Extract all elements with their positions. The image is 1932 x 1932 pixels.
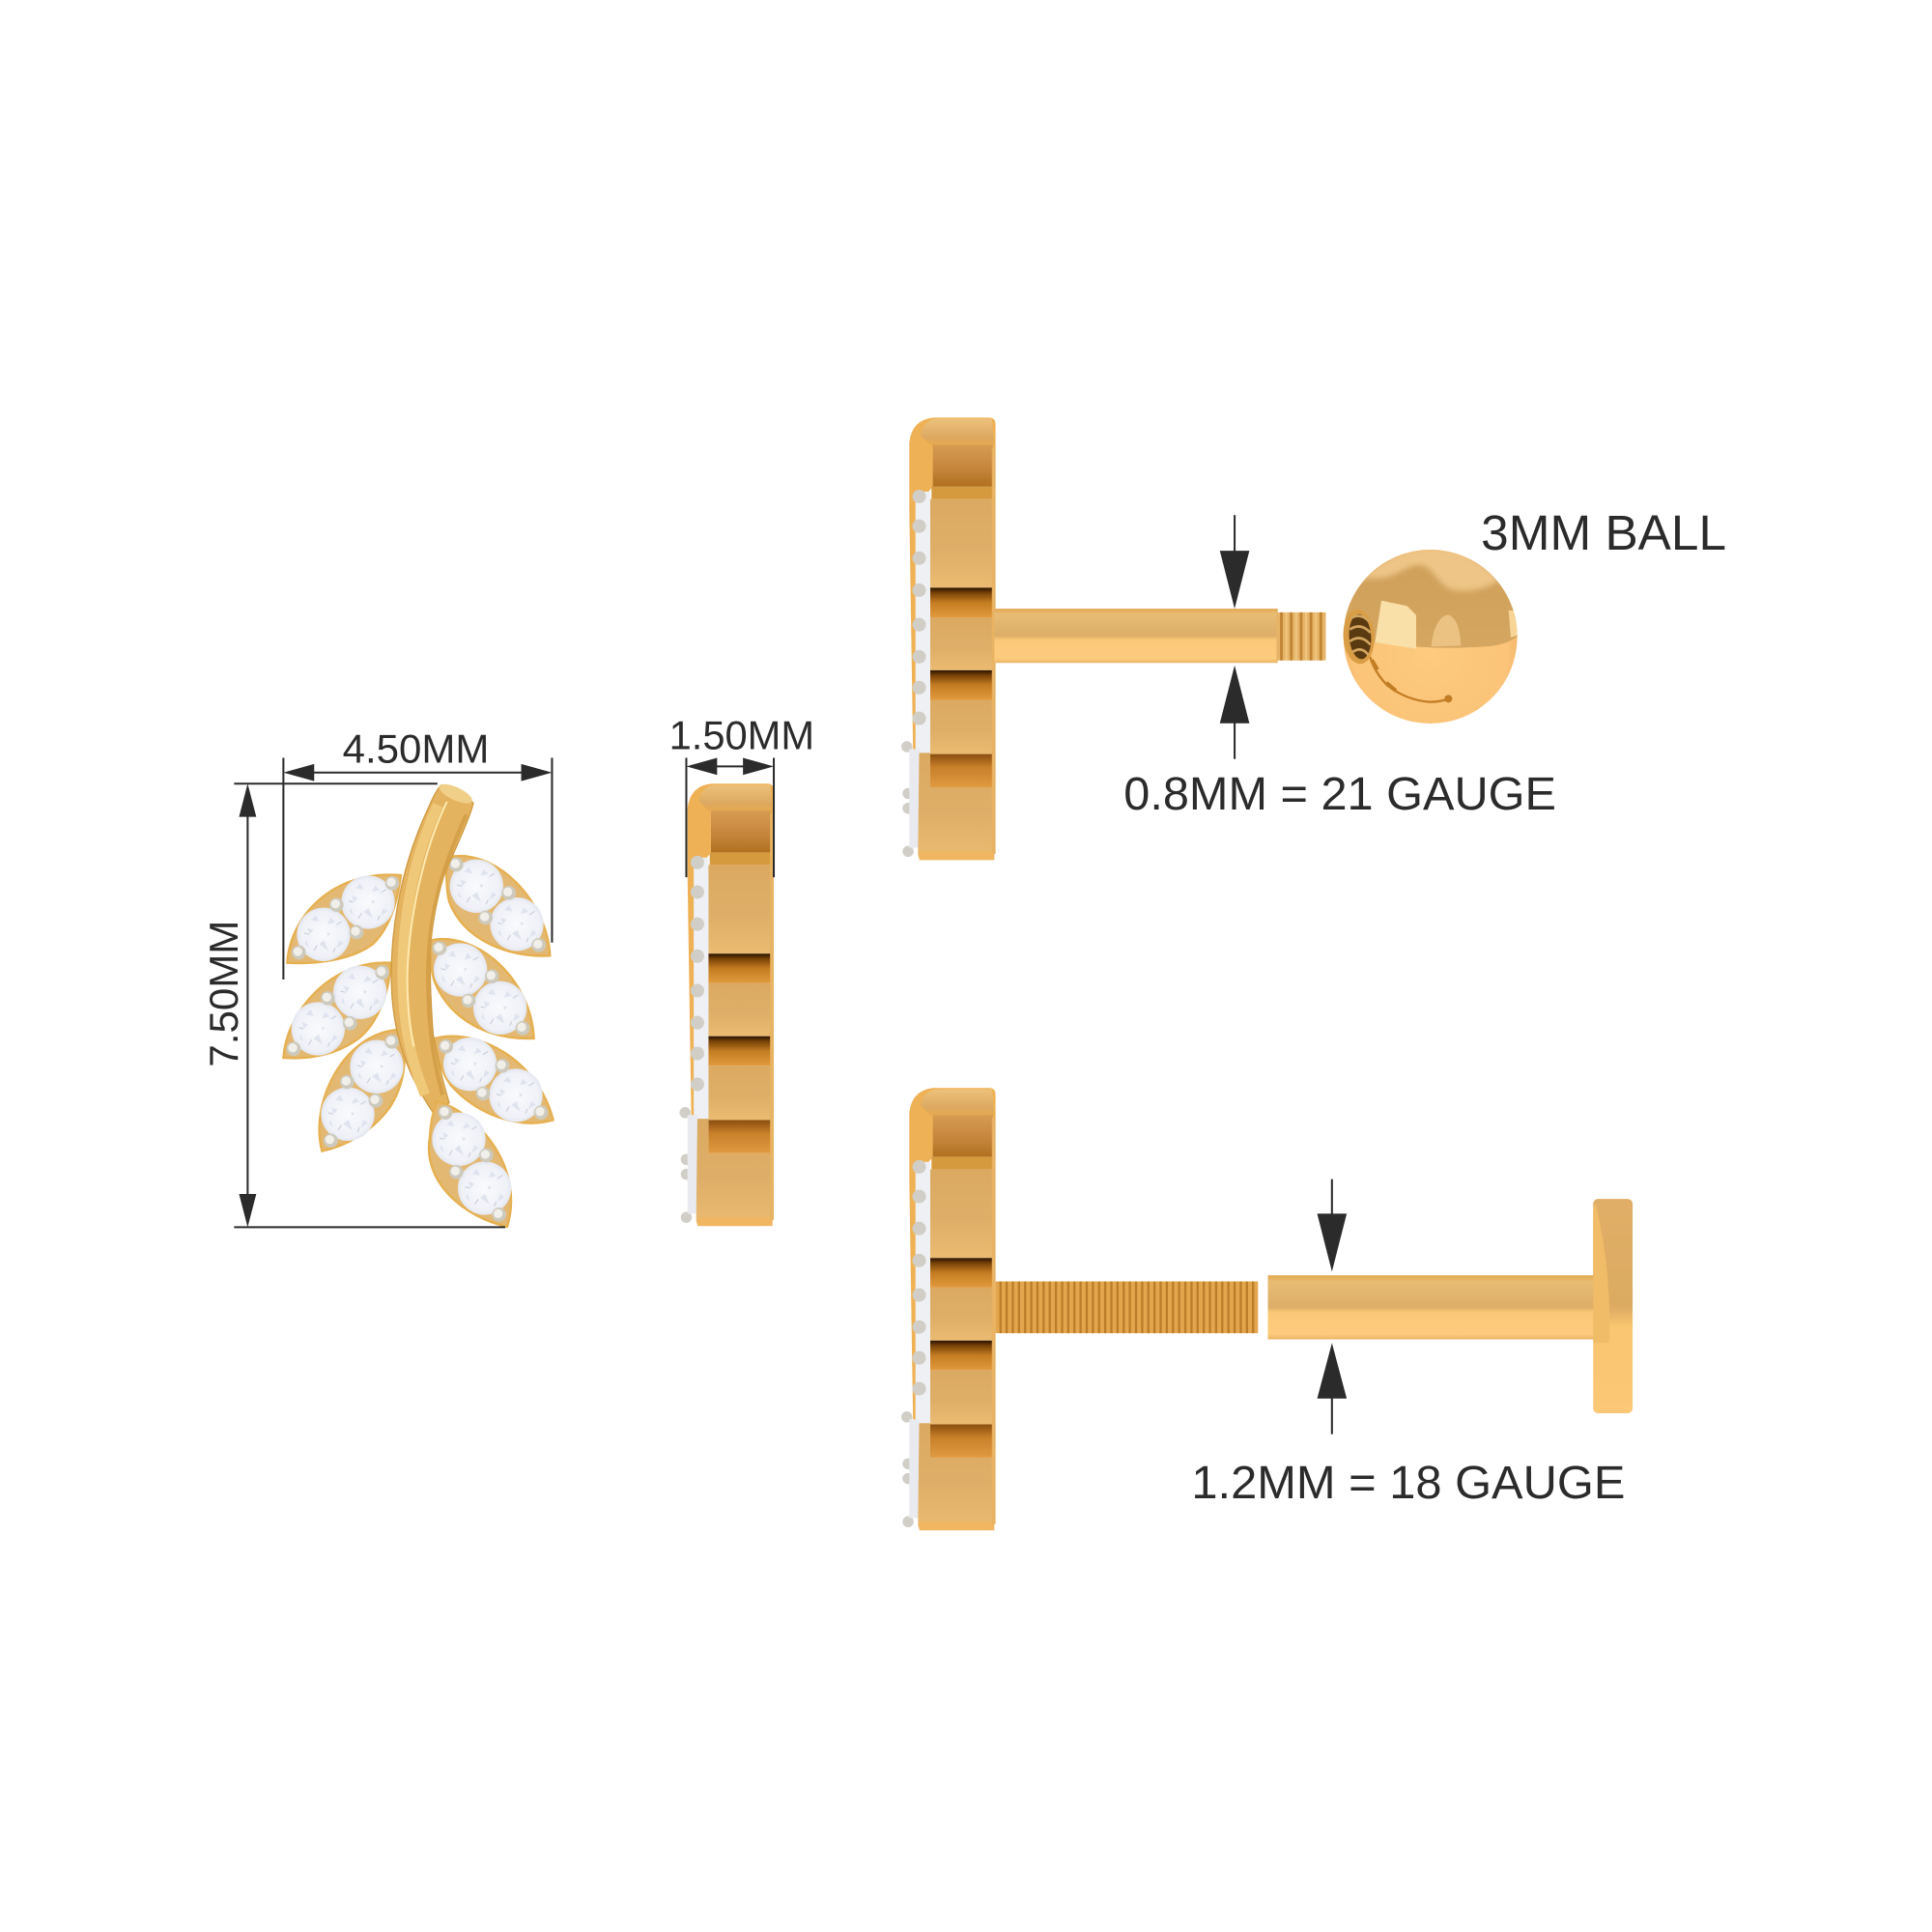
- leaf: top left: [287, 875, 401, 963]
- leaf: middle right: [430, 939, 534, 1038]
- dimension: width 4.50MM: 4.50MM: [343, 726, 489, 772]
- arrow: bottom: [1220, 666, 1249, 759]
- back rod: [1267, 1275, 1595, 1339]
- arrow: top: [1220, 515, 1249, 609]
- side view of leaf: [679, 783, 774, 1226]
- side view: lower: [901, 1088, 996, 1530]
- arrow: top: [1318, 1179, 1347, 1271]
- dimension: thickness 1.50MM: 1.50MM: [669, 713, 814, 758]
- dimension: height 7.50MM: 7.50MM: [201, 921, 246, 1067]
- label: gauge 18: 1.2MM = 18 GAUGE: [1191, 1457, 1625, 1509]
- threaded post: [996, 1282, 1258, 1333]
- stud with ball back: [901, 417, 1726, 860]
- leaf: bottom: [429, 1101, 511, 1227]
- stem: [391, 781, 474, 1113]
- dimension: height 7.50MM: [201, 783, 505, 1227]
- stud with flat back: [901, 1088, 1633, 1530]
- post threads: [1276, 612, 1325, 661]
- leaf: lower right: [435, 1037, 554, 1123]
- label: gauge 21: 0.8MM = 21 GAUGE: [1123, 768, 1556, 820]
- leaf: top right: [446, 856, 550, 956]
- dimension: width 4.50MM: [283, 726, 552, 980]
- dimension: thickness 1.50MM: [669, 713, 814, 877]
- arrow: bottom: [1318, 1343, 1347, 1435]
- side view: upper: [901, 417, 996, 860]
- leaf front view: [283, 781, 554, 1227]
- label: ball size: 3MM BALL: [1481, 505, 1726, 560]
- post: [994, 609, 1278, 663]
- leaf: lower left: [320, 1030, 405, 1151]
- leaf: middle left: [283, 963, 390, 1058]
- flat disc back: [1593, 1199, 1633, 1413]
- ball: [1340, 548, 1520, 724]
